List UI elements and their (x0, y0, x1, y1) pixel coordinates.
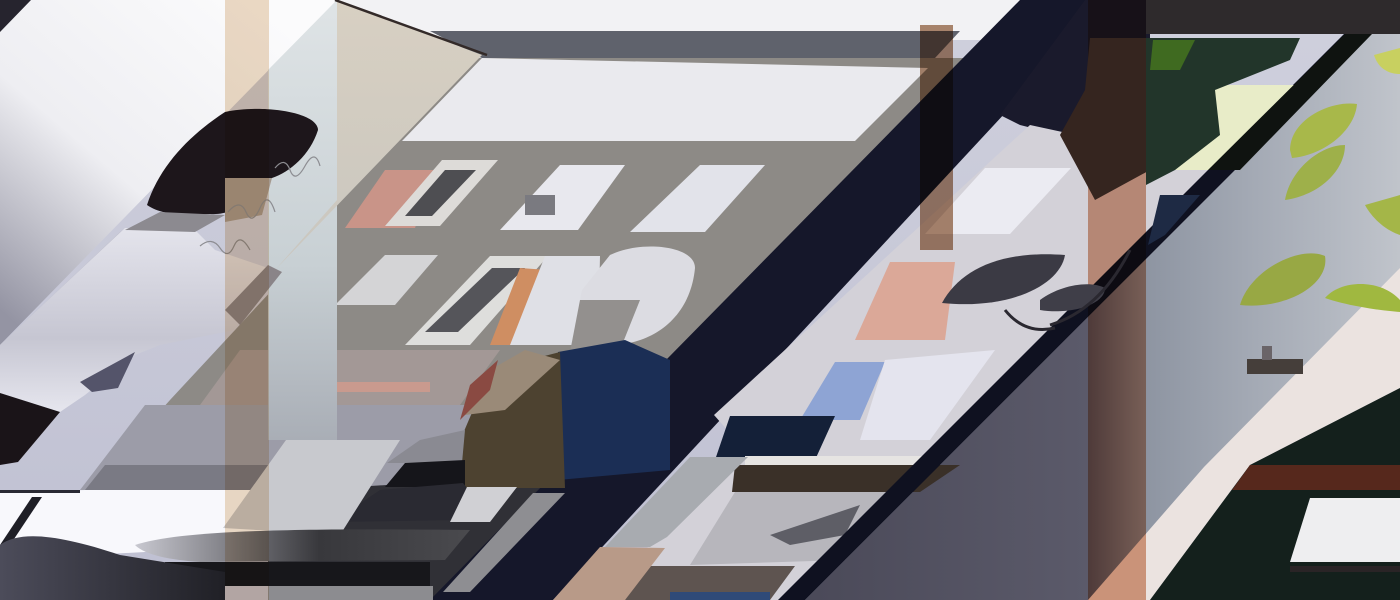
laptop (223, 440, 400, 535)
building: upper left pink wall patch (345, 170, 435, 228)
panel: pale glass strip (268, 0, 337, 440)
bag shadow (770, 505, 860, 545)
pale wedge in dark column (605, 457, 748, 547)
green leaf six (1374, 48, 1400, 74)
hand with pen (225, 265, 282, 325)
frame (500, 165, 625, 230)
green leaf five (1365, 195, 1400, 235)
whiteboard scribbles (200, 157, 320, 254)
dark arm (333, 483, 477, 522)
trousers (0, 393, 60, 465)
chair body (1150, 388, 1400, 600)
wood stripe (1232, 465, 1400, 490)
blue shirt patch (800, 362, 885, 420)
panel: floor bright strip (0, 490, 290, 560)
window: check upper left (385, 160, 498, 226)
scribble line two (228, 200, 275, 218)
scribble line three (200, 240, 250, 254)
stems (1005, 250, 1130, 330)
panel: street and building scene (80, 0, 1030, 490)
bright leaf tip (1150, 40, 1195, 70)
building: white window block (402, 58, 928, 141)
window: upper right (630, 165, 765, 232)
frame (405, 256, 548, 345)
panel: cream whiteboard (275, 0, 482, 270)
hair and head (580, 246, 695, 345)
face shadow (570, 300, 640, 352)
door handle (1247, 346, 1303, 374)
handle bar (1247, 359, 1303, 374)
building: grey strip (430, 31, 960, 58)
decoration: chair-back marks (0, 497, 42, 545)
tan vertical overlay right (1088, 0, 1146, 600)
panel: upper left bright wall (0, 0, 337, 345)
green leaf one (1290, 103, 1357, 158)
panes (405, 170, 476, 216)
panel: pale scene behind man (620, 125, 1215, 600)
bright gap behind leaves (1175, 85, 1320, 170)
figure: woman (0, 109, 318, 465)
scribble line one (275, 157, 320, 176)
green leaf four (1325, 284, 1400, 312)
pale band base (620, 125, 1215, 600)
neck shadow (125, 212, 225, 232)
grey bag shape (690, 492, 900, 565)
plate base (625, 566, 795, 600)
small bright rim (745, 456, 935, 465)
green leaf three (1240, 253, 1325, 306)
pale floor under table (268, 586, 433, 600)
lapel and shirt (465, 350, 560, 415)
dark hanging leaf one (942, 254, 1065, 304)
dark chair lower right (1150, 388, 1400, 600)
tan surface (553, 547, 665, 600)
building: pink stripe (320, 382, 430, 392)
tan jacket (440, 352, 565, 488)
tan vertical overlay left (225, 0, 269, 600)
panes (425, 268, 525, 332)
white gap (1290, 498, 1400, 562)
small navy leaf (1148, 195, 1200, 245)
distant navy bar (715, 416, 835, 460)
rod: whiteboard hanger (335, 0, 487, 55)
window: arched lower left (335, 255, 438, 305)
window: arched check lower (405, 256, 548, 345)
panel: lower right pale band (1088, 268, 1400, 600)
sky and bright top (337, 0, 1030, 40)
building: dark ground band (85, 465, 290, 490)
black torso (385, 460, 465, 487)
hair (147, 109, 318, 215)
arm gap shadow (80, 352, 135, 392)
wall under shirt (0, 228, 135, 395)
figure: seated man (333, 246, 695, 522)
top dark beam (1146, 0, 1400, 34)
white shirt patch (860, 350, 995, 440)
face (225, 178, 272, 222)
dark pane (525, 195, 555, 215)
hand and cuff (450, 487, 517, 522)
food plate (553, 547, 795, 600)
table top (135, 529, 470, 562)
shirt (0, 228, 268, 412)
panel: lower right wall / door (805, 5, 1400, 600)
dark strip over gap (1208, 34, 1372, 170)
panel: central dark column (430, 0, 1110, 600)
frame (385, 160, 498, 226)
green leaf two (1285, 145, 1345, 200)
building: brick wall (90, 58, 1000, 490)
window: upper centre (500, 165, 625, 230)
pink wall right (855, 262, 955, 340)
panel: thin dark diagonal strip (778, 0, 1400, 600)
navy jacket (558, 340, 670, 480)
building: orange wall patch (490, 268, 548, 345)
plant (942, 0, 1400, 330)
brown leaves (1060, 38, 1150, 200)
street: white stripes (510, 256, 600, 345)
chair (0, 536, 225, 600)
chair rail (1290, 566, 1400, 572)
decoration: dark floor line (0, 490, 80, 493)
building: mid pink band (200, 350, 500, 405)
window block right (925, 168, 1071, 234)
red tie shadow (460, 360, 498, 420)
panel: shaded area under the man's arm (268, 470, 620, 600)
corner: dark top-left wedge (0, 0, 31, 32)
handle post (1262, 346, 1272, 360)
plate blue (670, 592, 770, 600)
grey shirt under arm (387, 430, 465, 463)
table legs (165, 562, 430, 586)
dark green leaves (1146, 38, 1300, 185)
brown vertical overlay middle (920, 25, 953, 250)
table (135, 529, 470, 600)
dark hanging leaf two (1040, 284, 1105, 311)
dark counter (732, 465, 960, 492)
building: lower storey (80, 405, 620, 490)
grey band beside table (443, 493, 565, 592)
panel: dark top wedge (1000, 0, 1150, 200)
